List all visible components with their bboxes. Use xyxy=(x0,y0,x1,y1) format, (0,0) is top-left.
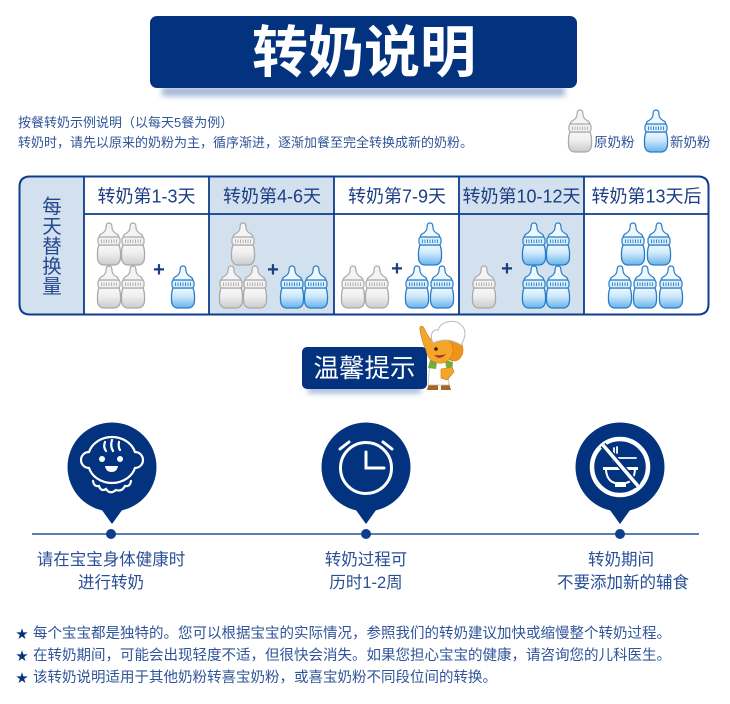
column headers: 转奶第10-12天 xyxy=(462,186,581,206)
column 5 bottles xyxy=(608,223,683,308)
row label: 每 xyxy=(42,196,62,218)
title banner xyxy=(150,16,577,96)
row label: 换 xyxy=(42,256,62,278)
column 1 bottles xyxy=(97,223,195,308)
legend: 原奶粉 xyxy=(594,135,635,150)
footnotes: 该转奶说明适用于其他奶粉转喜宝奶粉，或喜宝奶粉不同段位间的转换。 xyxy=(33,669,497,686)
row label: 量 xyxy=(42,276,62,298)
footnotes: ★ xyxy=(16,627,28,641)
column headers: 转奶第4-6天 xyxy=(223,186,321,206)
column 2 bottles: + xyxy=(267,259,279,281)
tip 3 text: 转奶期间 xyxy=(588,550,654,569)
footnotes: ★ xyxy=(16,671,28,685)
tip 1 text: 进行转奶 xyxy=(78,573,144,592)
column headers: 转奶第13天后 xyxy=(591,186,702,206)
footnotes xyxy=(16,625,671,686)
intro text: 按餐转奶示例说明（以每天5餐为例） xyxy=(18,115,233,130)
elephant chef mascot xyxy=(420,321,465,390)
row label: 天 xyxy=(42,216,62,238)
column 3 bottles xyxy=(341,223,454,308)
column 4 bottles xyxy=(472,223,570,308)
column 2 bottles xyxy=(219,223,328,308)
tip 1: baby icon pin xyxy=(68,422,156,524)
intro text xyxy=(18,115,473,150)
comparison table xyxy=(20,176,708,314)
tip 1 text xyxy=(37,550,185,592)
column 1 bottles: + xyxy=(153,259,165,281)
tip 2 text: 历时1-2周 xyxy=(329,573,403,592)
footnotes: 每个宝宝都是独特的。您可以根据宝宝的实际情况，参照我们的转奶建议加快或缩慢整个转奶过程。 xyxy=(33,625,671,642)
column 3 bottles: + xyxy=(391,258,403,280)
tips heading xyxy=(302,347,427,393)
column headers: 转奶第7-9天 xyxy=(348,186,446,206)
tips heading: 温馨提示 xyxy=(313,355,416,383)
column headers xyxy=(97,186,702,206)
row label xyxy=(42,196,62,298)
tip 3 text: 不要添加新的辅食 xyxy=(557,573,690,592)
tip 3: no extra food pin xyxy=(576,422,664,524)
legend xyxy=(568,110,711,152)
timeline line xyxy=(32,529,699,539)
footnotes: 在转奶期间，可能会出现轻度不适，但很快会消失。如果您担心宝宝的健康，请咨询您的儿科医生。 xyxy=(33,647,671,664)
tip 1 text: 请在宝宝身体健康时 xyxy=(37,550,185,569)
tip 2 text: 转奶过程可 xyxy=(325,550,407,569)
column headers: 转奶第1-3天 xyxy=(97,186,196,206)
intro text: 转奶时，请先以原来的奶粉为主，循序渐进，逐渐加餐至完全转换成新的奶粉。 xyxy=(18,135,473,150)
legend: 新奶粉 xyxy=(670,135,711,150)
tip 2: alarm clock pin xyxy=(322,422,410,524)
title banner: 转奶说明 xyxy=(252,21,476,84)
tip 2 text xyxy=(325,550,407,592)
column 4 bottles: + xyxy=(501,258,513,280)
tip 3 text xyxy=(557,550,690,592)
footnotes: ★ xyxy=(16,649,28,663)
row label: 替 xyxy=(42,236,62,258)
